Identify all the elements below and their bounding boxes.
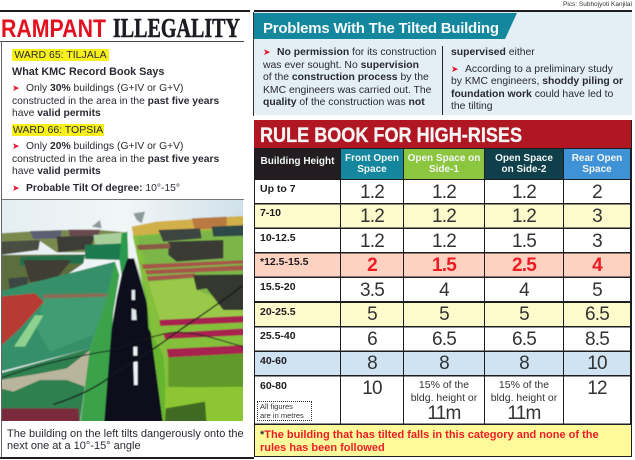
ward 66 text: Only 20% buildings (G+IV or G+V) <box>26 141 183 152</box>
column: front open space values: 1.2 <box>360 182 384 203</box>
panel: problems with the tilted building <box>254 12 632 115</box>
problems text left column: quality of the construction was not <box>263 97 425 108</box>
column: side 1 values: 11m <box>427 403 461 424</box>
row labels <box>260 183 308 392</box>
column: rear open space values: 8.5 <box>585 329 609 350</box>
problems text right column: by KMC engineers, shoddy piling or <box>451 76 623 87</box>
problems text left column: was ever sought. No supervision <box>263 60 419 71</box>
row backgrounds <box>255 180 630 424</box>
problems heading <box>254 13 517 39</box>
panel: rule book table <box>254 120 632 457</box>
column: front open space values <box>360 182 384 399</box>
ward 65 text <box>12 83 219 119</box>
header: side 1: Open Space on <box>408 153 480 164</box>
column: rear open space values: 12 <box>587 378 607 399</box>
column: side 2 values: 5 <box>519 304 529 325</box>
photo caption: next one at a 10°-15° angle <box>7 440 141 452</box>
column: side 1 values: bldg. height or <box>411 392 477 404</box>
problems text left column: KMC engineers was carried out. The <box>263 85 431 96</box>
column: side 2 values: 1.2 <box>512 182 536 203</box>
column: front open space values: 1.2 <box>360 206 384 227</box>
column: side 1 values <box>411 182 478 424</box>
column: side 1 values: 5 <box>439 304 449 325</box>
column: front open space values: 10 <box>362 378 382 399</box>
ward 66 heading: WARD 66: TOPSIA <box>13 124 103 136</box>
column: rear open space values: 5 <box>592 280 602 301</box>
rule book banner: RULE BOOK FOR HIGH-RISES <box>260 124 522 147</box>
column: rear open space values: 6.5 <box>585 304 609 325</box>
ward 65 text: have valid permits <box>12 108 101 119</box>
units note <box>257 401 312 421</box>
row labels: 20-25.5 <box>260 306 296 318</box>
column: front open space values: 8 <box>367 353 377 374</box>
photo credit: Pics: Subhojyoti Kanjilal <box>563 1 632 8</box>
header: side 2: Open Space <box>495 153 553 164</box>
column: side 2 values: 1.2 <box>512 206 536 227</box>
column: front open space values: 2 <box>367 255 377 276</box>
column: side 1 values: 1.2 <box>432 182 456 203</box>
photo: tilted buildings <box>2 200 243 421</box>
row labels: *12.5-15.5 <box>260 256 308 268</box>
column: side 2 values: bldg. height or <box>491 392 557 404</box>
header: front open space: Space <box>357 164 387 175</box>
tilt degree text: ➤ <box>12 183 20 193</box>
title <box>1 14 240 41</box>
ward 65 text: ➤ <box>12 83 20 93</box>
column: side 2 values: 2.5 <box>512 255 536 276</box>
header: front open space <box>341 149 403 179</box>
column: side 1 values: 1.5 <box>432 255 456 276</box>
header: side 2: on Side-2 <box>501 164 546 175</box>
header: side 2 <box>485 149 563 179</box>
photo caption <box>7 428 244 452</box>
ward 65 text: constructed in the area in the past five years <box>12 96 219 107</box>
header: side 1: Side-1 <box>429 164 459 175</box>
header: side 1 <box>404 149 484 179</box>
ward 66 text: constructed in the area in the past five years <box>12 154 219 165</box>
column: front open space values: 1.2 <box>360 231 384 252</box>
column: side 2 values: 6.5 <box>512 329 536 350</box>
footnote: rules has been followed <box>260 442 385 454</box>
column: front open space values: 5 <box>367 304 377 325</box>
footnote: *The building that has tilted falls in this category and none of the <box>260 429 599 441</box>
column: side 1 values: 8 <box>439 353 449 374</box>
column: rear open space values <box>585 182 609 399</box>
footnote <box>255 425 631 456</box>
ward 65 text: Only 30% buildings (G+IV or G+V) <box>26 83 183 94</box>
header: rear open space: Rear Open <box>572 153 622 164</box>
header: building height: Building Height <box>261 156 334 166</box>
column: side 2 values <box>491 182 558 424</box>
problems text right column: foundation work could have led to <box>451 89 613 100</box>
row labels: 10-12.5 <box>260 232 296 244</box>
column: side 2 values: 1.5 <box>512 231 536 252</box>
header: rear open space: Space <box>582 164 612 175</box>
rule book banner <box>254 120 631 148</box>
problems text right column <box>451 47 623 112</box>
column: rear open space values: 10 <box>587 353 607 374</box>
problems text left column: ➤ <box>263 47 271 57</box>
units note: are in metres <box>260 410 304 420</box>
problems text right column: supervised either According to a preliminary study <box>451 47 613 75</box>
column: side 2 values: 8 <box>519 353 529 374</box>
column: rear open space values: 3 <box>592 206 602 227</box>
header: building height <box>255 149 340 179</box>
column: front open space values: 6 <box>367 329 377 350</box>
row labels: 25.5-40 <box>260 330 296 342</box>
problems text left column: of the construction process by the <box>263 72 429 83</box>
column: side 2 values: 15% of the <box>499 379 549 391</box>
row labels: 40-60 <box>260 355 287 367</box>
problems heading: Problems With The Tilted Building <box>263 20 499 37</box>
ward 66 text <box>12 141 219 177</box>
table body <box>255 180 631 424</box>
column: side 1 values: 4 <box>439 280 449 301</box>
column: side 1 values: 15% of the <box>419 379 469 391</box>
column: side 1 values: 1.2 <box>432 231 456 252</box>
panel: ward permit records <box>12 49 219 194</box>
row labels: 15.5-20 <box>260 281 296 293</box>
units note: All figures <box>260 402 293 411</box>
column: front open space values: 3.5 <box>360 280 384 301</box>
ward 66 text: have valid permits <box>12 166 101 177</box>
column: rear open space values: 2 <box>592 182 602 203</box>
row labels: 60-80 <box>260 380 287 392</box>
problems text left column <box>263 47 436 108</box>
column: rear open space values: 3 <box>592 231 602 252</box>
ward 65 heading: WARD 65: TILJALA <box>14 49 107 61</box>
row labels: 7-10 <box>260 207 281 219</box>
problems text right column: ➤ <box>451 64 459 74</box>
tilt degree text: Probable Tilt Of degree: 10°-15° <box>26 183 180 194</box>
problems text left column: No permission for its construction <box>277 47 436 58</box>
record book subheading: What KMC Record Book Says <box>12 66 164 78</box>
table header row <box>261 149 630 179</box>
column: side 1 values: 6.5 <box>432 329 456 350</box>
column: side 2 values: 11m <box>507 403 541 424</box>
column: side 1 values: 1.2 <box>432 206 456 227</box>
header: front open space: Front Open <box>345 153 399 164</box>
row labels: Up to 7 <box>260 183 296 195</box>
column: rear open space values: 4 <box>592 255 602 276</box>
problems text right column: the tilting <box>451 101 493 112</box>
photo caption: The building on the left tilts dangerously onto the <box>7 428 244 440</box>
ward 66 text: ➤ <box>12 141 20 151</box>
column: side 2 values: 4 <box>519 280 529 301</box>
header: rear open space <box>564 149 630 179</box>
